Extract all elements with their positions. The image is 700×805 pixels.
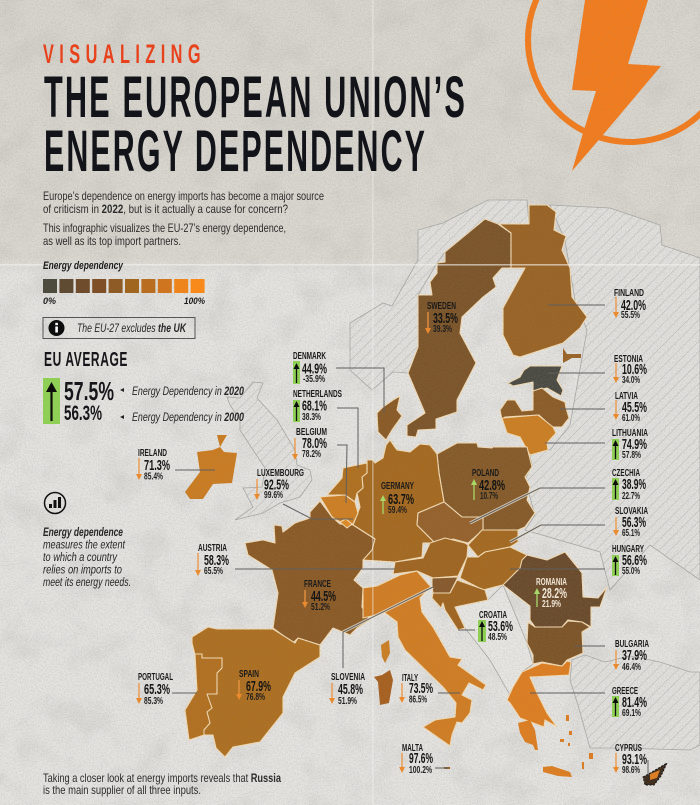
label: France: 51.2%: [311, 602, 330, 613]
Corsica: [381, 640, 390, 663]
label: Lithuania: LITHUANIA: [612, 428, 648, 439]
intro text: This infographic visualizes the EU-27’s energy dependence,: [43, 221, 286, 235]
label: Slovenia: 51.9%: [338, 696, 357, 707]
label: Ireland: [136, 448, 170, 482]
label: Croatia: 48.5%: [488, 632, 507, 643]
closing text: Taking a closer look at energy imports reveals that Russia: [43, 771, 281, 785]
country: Portugal: [185, 654, 222, 740]
label: France: FRANCE: [304, 579, 331, 590]
country: Sweden: [407, 219, 511, 437]
EU average: [43, 349, 244, 425]
country: Belgium: [320, 495, 358, 524]
label: Denmark: -35.9%: [303, 374, 325, 385]
label: Germany: [380, 481, 414, 516]
label: Finland: FINLAND: [614, 288, 644, 299]
label: Malta: MALTA: [402, 743, 423, 754]
label: Portugal: 65.3%: [144, 682, 170, 698]
label: Cyprus: 98.6%: [622, 765, 640, 776]
country: Ireland: [185, 435, 237, 499]
label: Austria: 65.5%: [204, 566, 223, 577]
label: Slovakia: SLOVAKIA: [615, 506, 648, 517]
label: Luxembourg: 92.5%: [264, 478, 289, 494]
label: Austria: 58.3%: [204, 553, 229, 569]
label: Netherlands: NETHERLANDS: [293, 389, 342, 400]
country: Slovenia: [432, 577, 458, 593]
label: Croatia: [478, 610, 513, 643]
icon: bar chart: [44, 492, 66, 514]
label: Italy: 86.5%: [409, 694, 427, 706]
country: Romania: [503, 552, 607, 627]
label: Croatia: CROATIA: [479, 610, 507, 621]
label: Slovenia: SLOVENIA: [331, 672, 365, 683]
country: Latvia: [500, 388, 569, 427]
label: Luxembourg: 99.6%: [264, 490, 283, 501]
non-EU neighbours: Turkey: [570, 655, 700, 750]
definition text: Energy dependence: [43, 527, 123, 539]
label: Malta: [399, 743, 433, 776]
closing text: is the main supplier of all three inputs.: [43, 783, 201, 797]
non-EU neighbours: Western Balkans: [455, 585, 533, 695]
label: Germany: 59.4%: [388, 505, 407, 516]
EU average: EU AVERAGE: [44, 349, 128, 371]
label: Czechia: [612, 468, 646, 502]
label: Luxembourg: LUXEMBOURG: [257, 468, 304, 479]
legend: energy dependency: 100%: [184, 296, 205, 306]
label: Netherlands: 68.1%: [302, 399, 327, 415]
country: Italy: [363, 571, 486, 746]
non-EU neighbours: United Kingdom: [227, 382, 312, 520]
label: Portugal: 85.3%: [144, 696, 163, 707]
label: Denmark: 44.9%: [302, 362, 327, 378]
label: Poland: 10.7%: [480, 491, 498, 502]
label: Netherlands: 38.3%: [302, 412, 321, 423]
EU average: 57.5%: [64, 376, 114, 406]
label: Czechia: 38.9%: [622, 477, 646, 493]
definition text: relies on imports to: [43, 564, 122, 576]
country: Germany: [353, 440, 444, 562]
definition text: measures the extent: [43, 540, 126, 552]
country: Greece: [507, 661, 571, 727]
country: France: [245, 501, 375, 645]
label: Latvia: 45.5%: [622, 400, 647, 416]
icon: lightning bolt in circle: [528, 0, 700, 171]
country: Lithuania: [502, 415, 556, 455]
label: Bulgaria: 46.4%: [622, 662, 641, 673]
label: France: [302, 579, 336, 613]
label: Greece: GREECE: [612, 686, 638, 697]
label: Malta: 97.6%: [409, 751, 433, 767]
label: Finland: [613, 288, 646, 321]
label: Bulgaria: [613, 639, 649, 673]
label: Cyprus: CYPRUS: [615, 743, 642, 754]
label: Denmark: [293, 351, 327, 385]
leader lines: [172, 305, 648, 775]
label: Ireland: 85.4%: [144, 472, 163, 482]
label: Greece: 81.4%: [622, 695, 647, 711]
label: Ireland: IRELAND: [138, 448, 167, 459]
label: Italy: ITALY: [402, 673, 418, 684]
label: Austria: AUSTRIA: [198, 543, 227, 554]
country: Poland: [437, 443, 535, 530]
country: Finland: [499, 205, 587, 357]
label: Luxembourg: [254, 468, 304, 501]
EU average: 56.3%: [64, 402, 102, 425]
label: Italy: 73.5%: [409, 681, 433, 697]
label: Hungary: 55.0%: [622, 566, 640, 577]
label: Slovakia: 56.3%: [622, 515, 646, 531]
country: Malta: [444, 767, 450, 769]
label: Germany: GERMANY: [381, 481, 414, 492]
label: Slovakia: 65.1%: [622, 528, 640, 539]
closing text: [43, 771, 281, 797]
label: Malta: 100.2%: [409, 765, 432, 776]
country: Netherlands: [327, 463, 367, 502]
Finland exclave: [563, 348, 581, 363]
EU average: Energy Dependency in 2020: [132, 386, 244, 398]
label: Lithuania: 74.9%: [622, 437, 647, 453]
country: Austria: [393, 538, 468, 578]
label: Poland: 42.8%: [479, 478, 505, 494]
intro text: Europe’s dependence on energy imports has become a major source: [43, 189, 324, 203]
note: EU-27 excludes the UK: [43, 318, 195, 338]
label: Cyprus: 93.1%: [622, 752, 647, 768]
country: Croatia: [432, 580, 488, 630]
intro text: [43, 189, 324, 248]
label: Spain: 76.8%: [246, 692, 265, 703]
intro text: as well as its top import partners.: [43, 234, 181, 248]
label: Belgium: 78.0%: [302, 436, 327, 452]
non-EU neighbours: Russia, Belarus, Ukraine: [525, 205, 700, 590]
label: Estonia: 10.6%: [622, 362, 647, 378]
label: Austria: [195, 543, 229, 577]
country: Bulgaria: [527, 621, 590, 666]
note: EU-27 excludes the UK: The EU-27 excludes the UK: [77, 323, 187, 335]
Greek islands: [518, 715, 593, 777]
intro text: of criticism in 2022, but is it actually a cause for concern?: [43, 202, 288, 216]
label: Lithuania: 57.8%: [622, 450, 641, 461]
label: Hungary: [612, 544, 647, 577]
label: Czechia: CZECHIA: [612, 468, 640, 479]
green up arrow: [43, 378, 60, 424]
label: Greece: 69.1%: [622, 708, 641, 719]
label: Belgium: [292, 427, 327, 460]
label: Finland: 55.5%: [621, 310, 640, 321]
label: Hungary: 56.6%: [622, 553, 647, 569]
Sardinia: [374, 670, 393, 705]
label: France: 44.5%: [311, 589, 336, 605]
label: Croatia: 53.6%: [488, 619, 513, 635]
label: Poland: POLAND: [472, 468, 499, 479]
non-EU neighbours: Norway: [350, 200, 529, 390]
label: Italy: [399, 673, 433, 706]
label: Greece: [612, 686, 647, 719]
label: Belgium: 78.2%: [302, 449, 321, 460]
country: Estonia: [508, 366, 563, 396]
label: Bulgaria: BULGARIA: [615, 639, 649, 650]
label: Spain: [236, 669, 271, 703]
country: Spain: [185, 627, 320, 757]
country: Cyprus: [643, 763, 667, 785]
country: Hungary: [460, 547, 527, 590]
label: Sweden: SWEDEN: [427, 301, 456, 312]
label: Romania: [534, 577, 567, 610]
label: Slovenia: [329, 672, 365, 707]
label: Estonia: [613, 354, 647, 386]
EU average: Energy Dependency in 2000: [132, 412, 244, 424]
label: Lithuania: [612, 428, 648, 461]
label: Portugal: PORTUGAL: [138, 672, 173, 683]
label: Sweden: 39.3%: [433, 324, 452, 335]
eyebrow: visualizing: VISUALIZING: [43, 39, 206, 69]
country: Denmark: [377, 396, 402, 440]
label: Portugal: [136, 672, 173, 707]
definition text: to which a country: [43, 552, 118, 564]
country: Czechia: [417, 502, 483, 543]
label: Romania: ROMANIA: [536, 577, 567, 588]
label: Spain: 67.9%: [246, 679, 271, 695]
map of Europe: [185, 200, 700, 785]
country: Luxembourg: [340, 519, 352, 528]
label: Latvia: [613, 391, 647, 424]
label: Poland: [471, 468, 505, 502]
label: Romania: 21.9%: [542, 599, 561, 610]
legend: energy dependency: Energy dependency: [43, 260, 124, 272]
label: Czechia: 22.7%: [622, 491, 640, 502]
label: Slovenia: 45.8%: [338, 682, 363, 698]
label: Estonia: ESTONIA: [614, 354, 643, 365]
definition text: [43, 527, 131, 589]
label: Germany: 63.7%: [388, 492, 414, 508]
label: Estonia: 34.0%: [622, 375, 640, 386]
label: Ireland: 71.3%: [144, 458, 170, 474]
title: [44, 65, 467, 184]
label: Romania: 28.2%: [542, 586, 567, 602]
label: Netherlands: [293, 389, 342, 423]
legend: energy dependency: 0%: [43, 296, 56, 306]
label: Latvia: LATVIA: [615, 391, 638, 402]
label: Slovakia: [613, 506, 648, 539]
label: Belgium: BELGIUM: [296, 427, 327, 438]
legend: energy dependency: [43, 260, 205, 306]
label: Hungary: HUNGARY: [612, 544, 644, 555]
label: Sweden: 33.5%: [433, 311, 458, 327]
label: Sweden: [425, 301, 458, 335]
definition text: meet its energy needs.: [43, 577, 131, 589]
label: Denmark: DENMARK: [293, 351, 327, 362]
label: Cyprus: [613, 743, 647, 776]
label: Spain: SPAIN: [239, 669, 259, 680]
label: Finland: 42.0%: [621, 298, 646, 314]
label: Latvia: 61.0%: [622, 413, 640, 424]
country: Slovakia: [468, 530, 518, 557]
label: Bulgaria: 37.9%: [622, 648, 647, 664]
